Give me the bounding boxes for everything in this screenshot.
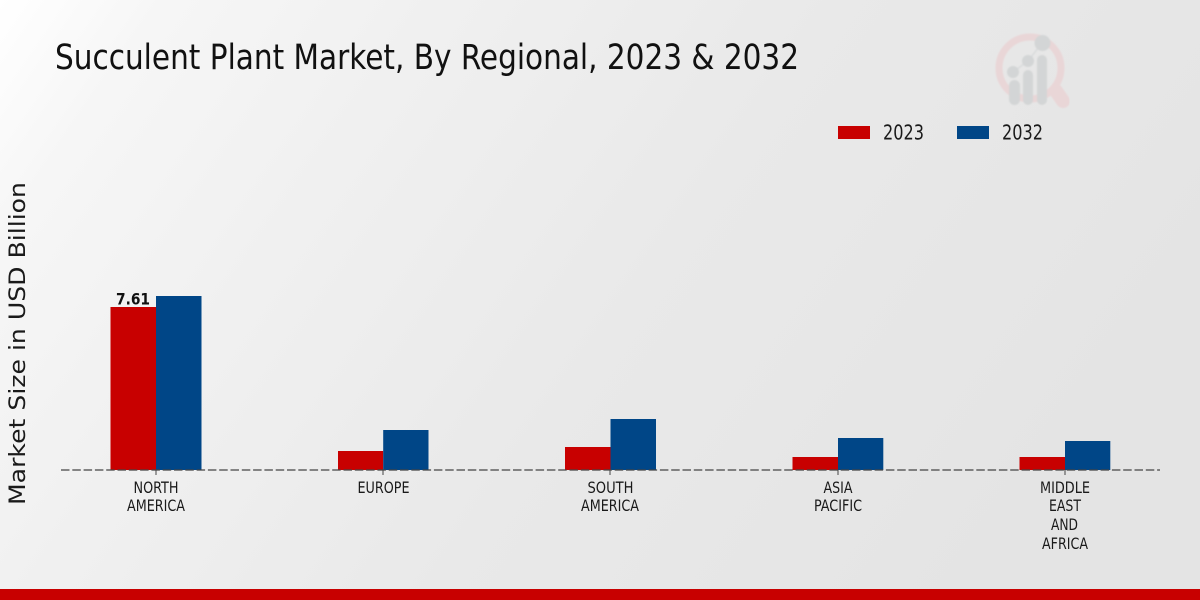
Europe bars (338, 430, 428, 470)
legend: 2023 (838, 120, 924, 144)
legend (838, 120, 1043, 144)
label: Asia Pacific: ASIA (824, 478, 853, 497)
label: North America: NORTH (134, 478, 178, 497)
label: South America (581, 478, 639, 515)
label: North America: AMERICA (127, 496, 185, 515)
label: Europe: EUROPE (358, 478, 410, 497)
label: Asia Pacific (814, 478, 862, 515)
x-axis labels (127, 478, 1090, 553)
label: South America: SOUTH (588, 478, 634, 497)
legend: 2032 (957, 120, 1043, 144)
Asia Pacific bars (792, 438, 883, 470)
legend: 2032: 2032 (1002, 120, 1043, 144)
label: North America (127, 478, 185, 515)
label: Middle East and Africa: EAST (1049, 496, 1081, 515)
label: South America: AMERICA (581, 496, 639, 515)
North America bars (110, 290, 202, 470)
label: Asia Pacific: PACIFIC (814, 496, 862, 515)
label: Middle East and Africa: AND (1051, 515, 1078, 534)
label: Middle East and Africa (1040, 478, 1090, 553)
label: Middle East and Africa: AFRICA (1042, 534, 1088, 553)
label: Middle East and Africa: MIDDLE (1040, 478, 1090, 497)
y-axis title: Market Size in USD Billion (5, 182, 31, 505)
data label: 7.61: 7.61 (116, 290, 150, 308)
x-axis baseline (61, 469, 1160, 471)
South America bars (565, 419, 656, 470)
legend: 2023: 2023 (883, 120, 924, 144)
bar chart (61, 290, 1160, 475)
watermark logo icon (999, 35, 1063, 105)
bottom red band (0, 589, 1200, 600)
Middle East and Africa bars (1020, 441, 1110, 470)
title: Succulent Plant Market, By Regional, 2023 & 2032 (55, 38, 799, 78)
